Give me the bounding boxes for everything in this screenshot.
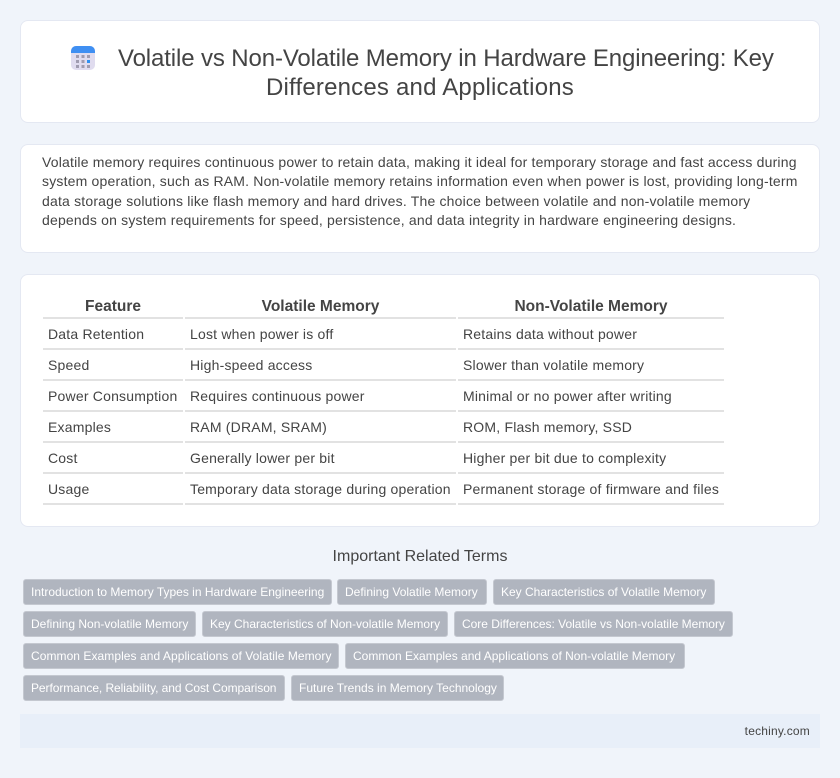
intro text: data storage solutions like flash memory and hard drives. The choice between volatile and non-volatile memory	[42, 193, 750, 209]
row: usage: Usage	[48, 481, 89, 497]
row: examples: Examples	[48, 419, 111, 435]
title	[118, 45, 774, 101]
row: cost: Cost	[48, 450, 78, 466]
row: data retention: Lost when power is off	[190, 326, 333, 342]
panel: comparison table	[20, 274, 820, 527]
table header	[85, 298, 668, 315]
row: speed: Slower than volatile memory	[463, 357, 644, 373]
intro text	[42, 154, 798, 228]
table header: Volatile Memory	[262, 298, 379, 315]
related term chips	[23, 579, 733, 701]
related term chips: Key Characteristics of Non-volatile Memory	[210, 617, 440, 631]
footer bar	[20, 714, 820, 748]
row: power consumption: Requires continuous power	[190, 388, 365, 404]
row: cost: Generally lower per bit	[190, 450, 335, 466]
row: cost	[48, 450, 666, 466]
intro text: system operation, such as RAM. Non-volatile memory retains information even when power is lost, providing long-term	[42, 173, 798, 189]
related term chips: Core Differences: Volatile vs Non-volatile Memory	[462, 617, 725, 631]
table header: Non-Volatile Memory	[514, 298, 668, 315]
title: Volatile vs Non-Volatile Memory in Hardware Engineering: Key	[118, 45, 774, 72]
row: power consumption	[48, 388, 672, 404]
title: Differences and Applications	[266, 74, 574, 101]
footer source: techiny.com	[745, 724, 810, 738]
intro text: depends on system requirements for speed, persistence, and data integrity in hardware engineering designs.	[42, 212, 736, 228]
row: usage: Permanent storage of firmware and files	[463, 481, 719, 497]
row: usage	[48, 481, 719, 497]
row: data retention: Retains data without power	[463, 326, 637, 342]
row: speed: High-speed access	[190, 357, 312, 373]
related term chips: Performance, Reliability, and Cost Comparison	[31, 681, 276, 695]
related term chips: Common Examples and Applications of Non-volatile Memory	[353, 649, 675, 663]
row: data retention	[48, 326, 637, 342]
table header: Feature	[85, 298, 141, 315]
row: power consumption: Power Consumption	[48, 388, 177, 404]
row: cost: Higher per bit due to complexity	[463, 450, 666, 466]
row: examples: ROM, Flash memory, SSD	[463, 419, 632, 435]
row: data retention: Data Retention	[48, 326, 144, 342]
heading: related terms: Important Related Terms	[333, 548, 507, 565]
related term chips: Defining Non-volatile Memory	[31, 617, 188, 631]
related term chips: Introduction to Memory Types in Hardware Engineering	[31, 585, 324, 599]
related term chips: Common Examples and Applications of Volatile Memory	[31, 649, 332, 663]
row: power consumption: Minimal or no power after writing	[463, 388, 672, 404]
icon: memory chip	[71, 46, 95, 70]
related term chips: Future Trends in Memory Technology	[299, 681, 497, 695]
panel: introduction	[20, 144, 820, 253]
related term chips: Defining Volatile Memory	[345, 585, 478, 599]
row: examples: RAM (DRAM, SRAM)	[190, 419, 327, 435]
panel: header	[20, 20, 820, 123]
row: usage: Temporary data storage during operation	[190, 481, 451, 497]
row: speed	[48, 357, 644, 373]
related term chips: Key Characteristics of Volatile Memory	[501, 585, 706, 599]
row: speed: Speed	[48, 357, 89, 373]
row: examples	[48, 419, 632, 435]
intro text: Volatile memory requires continuous power to retain data, making it ideal for temporary storage and fast access during	[42, 154, 797, 170]
